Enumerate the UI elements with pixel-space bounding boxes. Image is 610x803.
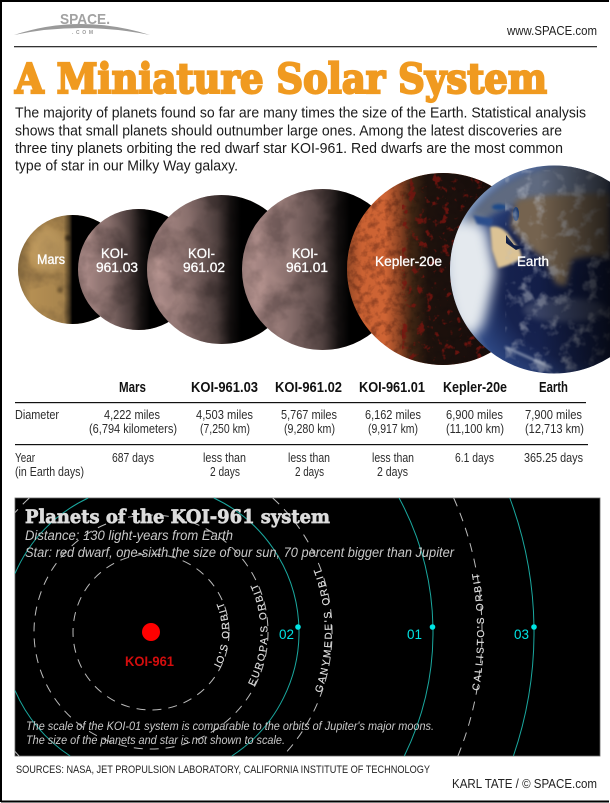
intro text: The majority of planets found so far are many times the size of the Earth. Statistical analysis [15, 104, 586, 122]
year row [15, 450, 583, 479]
diameter row: (12,713 km) [525, 421, 584, 436]
orbit labels: EUROPA'S ORBIT [248, 585, 268, 686]
Black Sea and Caspian [492, 204, 506, 210]
diameter row: (11,100 km) [446, 421, 504, 436]
planet: KOI-961.03 [78, 209, 199, 330]
logo: SPACE.com [14, 11, 150, 36]
planet labels: Mars [37, 252, 65, 267]
intro text: three tiny planets orbiting the red dwarf star KOI-961. Red dwarfs are the most common [15, 140, 563, 157]
orbit labels: IO'S ORBIT [214, 604, 229, 668]
orbit labels: GANYMEDE'S ORBIT [314, 570, 332, 692]
diameter row: 7,900 miles [525, 407, 582, 422]
planet: KOI-961.01 [242, 189, 403, 350]
Asia [510, 194, 610, 286]
year row: 687 days [112, 450, 154, 465]
clouds [505, 170, 610, 375]
panel title: Planets of the KOI-961 system [25, 506, 330, 528]
diameter row: (7,250 km) [200, 421, 250, 436]
moon orbits [15, 498, 482, 756]
Mediterranean [473, 215, 493, 226]
planet labels: 961.03 [96, 260, 138, 275]
year row: Year [15, 450, 35, 465]
year row: 2 days [210, 464, 240, 479]
table header: KOI-961.01 [359, 380, 425, 396]
table header [119, 380, 568, 396]
planet: Kepler-20e [347, 173, 492, 365]
year row: less than [288, 450, 330, 465]
table header: KOI-961.02 [275, 380, 342, 396]
year row: (in Earth days) [15, 464, 84, 479]
orbit diagram [15, 498, 534, 756]
planet: Earth [444, 160, 610, 375]
diameter row: 5,767 miles [281, 407, 337, 422]
table header: KOI-961.03 [191, 380, 258, 396]
diameter row: Diameter [15, 407, 60, 422]
planet labels: KOI- [188, 246, 215, 261]
planet labels [37, 246, 549, 275]
scale note [26, 721, 434, 747]
header rule [14, 46, 597, 47]
system facts: Star: red dwarf, one-sixth the size of our sun, 70 percent bigger than Jupiter [25, 545, 454, 560]
table header: Kepler-20e [443, 380, 507, 396]
Arabia [490, 226, 522, 268]
table header: Mars [119, 380, 146, 396]
sources: SOURCES: NASA, JET PROPULSION LABORATORY, CALIFORNIA INSTITUTE OF TECHNOLOGY [16, 764, 431, 776]
planet labels: KOI- [292, 246, 318, 261]
intro text: shows that small planets should outnumber large ones. Among the latest discoveries are [15, 122, 562, 140]
title: A Miniature Solar System [14, 55, 547, 103]
table header: Earth [539, 380, 568, 396]
year row: 2 days [295, 464, 324, 479]
intro text: type of star in our Milky Way galaxy. [15, 158, 238, 174]
planet 02 [279, 624, 301, 642]
planet labels: KOI- [101, 246, 128, 261]
diameter row: 4,222 miles [104, 407, 160, 422]
orbit labels [214, 570, 484, 692]
diameter row: (9,280 km) [284, 421, 335, 436]
diameter row: (9,917 km) [368, 421, 418, 436]
planet orbits [15, 498, 534, 756]
year row: 6.1 days [455, 450, 494, 465]
planet 03: 03 [514, 626, 529, 642]
planet 03 [514, 624, 537, 642]
planet 01 [407, 624, 435, 642]
star: KOI-961: KOI-961 [125, 654, 174, 669]
diameter row: (6,794 kilometers) [89, 421, 177, 436]
planet labels: Earth [517, 254, 549, 269]
orbit labels: CALLISTO'S ORBIT [472, 574, 484, 690]
scale note: The scale of the KOI-01 system is comparable to the orbits of Jupiter's major moons. [26, 721, 434, 733]
planet 01: 01 [407, 626, 422, 642]
Africa cloud cover [444, 220, 496, 335]
year row: 2 days [377, 464, 408, 479]
year row: less than [372, 450, 414, 465]
system facts: Distance: 130 light-years from Earth [25, 528, 233, 543]
comparison table [15, 380, 588, 479]
planet: Mars [18, 215, 100, 324]
planet size comparison [18, 160, 610, 375]
star: KOI-961 [125, 623, 174, 669]
planet: KOI-961.02 [147, 195, 296, 344]
planet 02: 02 [279, 626, 294, 642]
planet labels: 961.02 [183, 260, 225, 275]
logo: SPACE.com: .COM [72, 30, 93, 36]
year row: less than [203, 450, 246, 465]
planet labels: 961.01 [286, 260, 328, 275]
website address: www.SPACE.com [506, 24, 597, 38]
diameter row: 6,900 miles [446, 407, 503, 422]
logo: SPACE.com: SPACE. [60, 11, 110, 28]
diameter row [15, 407, 584, 436]
diameter row: 6,162 miles [365, 407, 421, 422]
diameter row: 4,503 miles [196, 407, 253, 422]
northern cloud belt [466, 166, 610, 224]
planet labels: Kepler-20e [375, 254, 442, 269]
panel: KOI-961 system [14, 498, 600, 756]
intro text [15, 104, 586, 174]
scale note: The size of the planets and star is not shown to scale. [26, 735, 285, 747]
year row: 365.25 days [524, 450, 583, 465]
system facts [25, 528, 454, 560]
